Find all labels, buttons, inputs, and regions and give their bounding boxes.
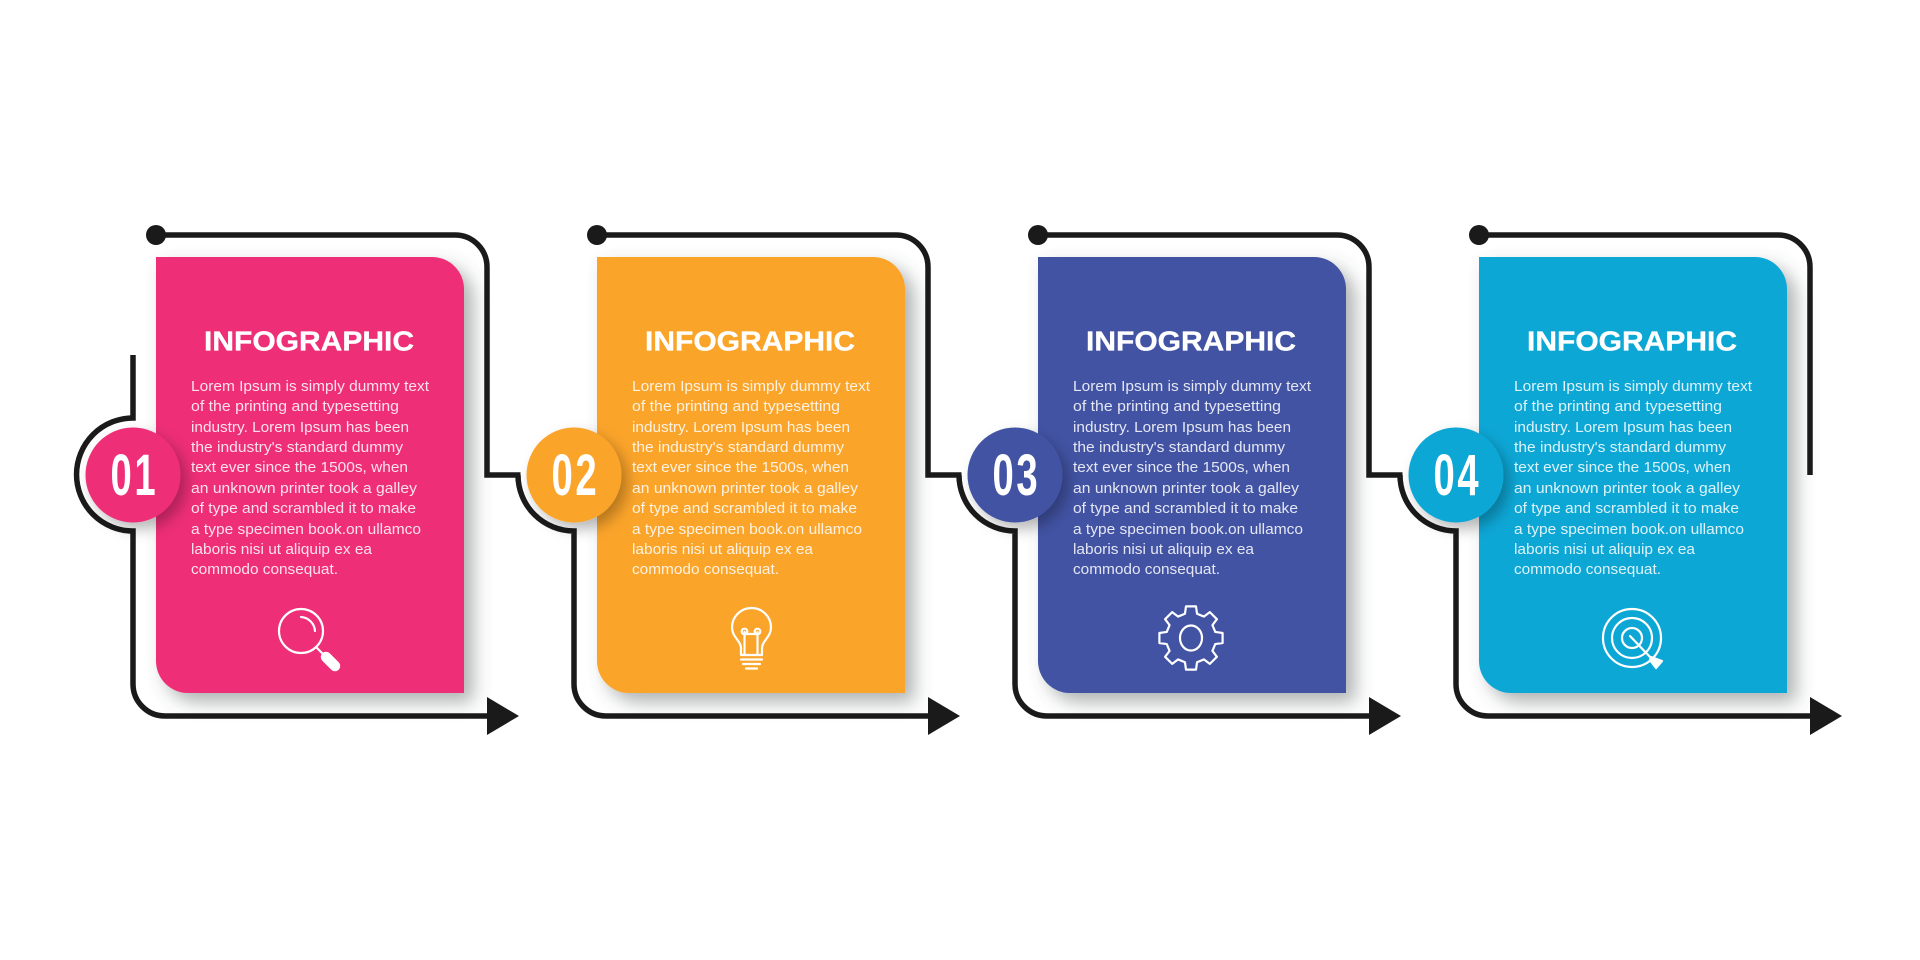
body text: the industry's standard dummy <box>191 439 404 456</box>
arrow head <box>487 697 519 735</box>
start dot <box>1469 225 1489 245</box>
flow line around number <box>1400 475 1813 716</box>
body text: commodo consequat. <box>1514 561 1661 578</box>
body text: of the printing and typesetting <box>632 398 840 415</box>
flow line around number <box>77 355 490 716</box>
body text: Lorem Ipsum is simply dummy text <box>1073 378 1312 395</box>
body text: industry. Lorem Ipsum has been <box>1514 419 1732 436</box>
icon: target with arrow <box>1603 609 1662 668</box>
heading: INFOGRAPHIC <box>1086 326 1296 356</box>
body text: of type and scrambled it to make <box>191 500 416 517</box>
heading: INFOGRAPHIC <box>645 326 855 356</box>
body text: laboris nisi ut aliquip ex ea <box>1073 541 1255 558</box>
connector line <box>156 235 520 475</box>
number: 03 <box>992 444 1040 508</box>
body text: a type specimen book.on ullamco <box>191 521 421 538</box>
flow line around number <box>518 475 931 716</box>
body text: commodo consequat. <box>632 561 779 578</box>
body text <box>191 378 430 578</box>
arrow head <box>928 697 960 735</box>
body text: of the printing and typesetting <box>1073 398 1281 415</box>
body text: an unknown printer took a galley <box>1073 480 1300 497</box>
number badge <box>86 428 180 522</box>
body text: an unknown printer took a galley <box>191 480 418 497</box>
body text: the industry's standard dummy <box>1073 439 1286 456</box>
flow line around number <box>959 475 1372 716</box>
body text <box>632 378 871 578</box>
body text: of type and scrambled it to make <box>632 500 857 517</box>
body text: of the printing and typesetting <box>191 398 399 415</box>
connector line <box>597 235 962 475</box>
body text: of the printing and typesetting <box>1514 398 1722 415</box>
panel: step 2 <box>518 225 962 735</box>
body text <box>1073 378 1312 578</box>
body text: laboris nisi ut aliquip ex ea <box>1514 541 1696 558</box>
card background <box>156 257 464 693</box>
body text: industry. Lorem Ipsum has been <box>1073 419 1291 436</box>
body text: Lorem Ipsum is simply dummy text <box>632 378 871 395</box>
body text: commodo consequat. <box>1073 561 1220 578</box>
card background <box>597 257 905 693</box>
panel: step 4 <box>1400 225 1842 735</box>
body text: text ever since the 1500s, when <box>1514 459 1731 476</box>
body text <box>1514 378 1753 578</box>
body text: industry. Lorem Ipsum has been <box>191 419 409 436</box>
body text: text ever since the 1500s, when <box>632 459 849 476</box>
number: 01 <box>110 444 158 508</box>
icon: magnifying glass <box>279 609 335 666</box>
panel: step 1 <box>77 225 521 735</box>
number: 04 <box>1434 444 1481 508</box>
body text: industry. Lorem Ipsum has been <box>632 419 850 436</box>
heading: INFOGRAPHIC <box>204 326 414 356</box>
body text: the industry's standard dummy <box>632 439 845 456</box>
body text: an unknown printer took a galley <box>632 480 859 497</box>
start dot <box>146 225 166 245</box>
heading: INFOGRAPHIC <box>1527 326 1737 356</box>
card background <box>1038 257 1346 693</box>
arrow head <box>1810 697 1842 735</box>
body text: a type specimen book.on ullamco <box>1514 521 1744 538</box>
body text: text ever since the 1500s, when <box>1073 459 1290 476</box>
panel: step 3 <box>959 225 1402 735</box>
body text: a type specimen book.on ullamco <box>632 521 862 538</box>
number badge <box>1408 428 1504 522</box>
icon: gear <box>1159 606 1223 670</box>
body text: Lorem Ipsum is simply dummy text <box>1514 378 1753 395</box>
body text: an unknown printer took a galley <box>1514 480 1741 497</box>
body text: of type and scrambled it to make <box>1073 500 1298 517</box>
start dot <box>587 225 607 245</box>
body text: laboris nisi ut aliquip ex ea <box>632 541 814 558</box>
connector line <box>1479 235 1810 475</box>
body text: a type specimen book.on ullamco <box>1073 521 1303 538</box>
number: 02 <box>552 444 599 508</box>
body text: of type and scrambled it to make <box>1514 500 1739 517</box>
connector line <box>1038 235 1402 475</box>
start dot <box>1028 225 1048 245</box>
number badge <box>526 428 622 522</box>
body text: laboris nisi ut aliquip ex ea <box>191 541 373 558</box>
number badge <box>968 428 1062 522</box>
body text: Lorem Ipsum is simply dummy text <box>191 378 430 395</box>
body text: text ever since the 1500s, when <box>191 459 408 476</box>
body text: the industry's standard dummy <box>1514 439 1727 456</box>
arrow head <box>1369 697 1401 735</box>
icon: light bulb <box>732 608 771 668</box>
body text: commodo consequat. <box>191 561 338 578</box>
card background <box>1479 257 1787 693</box>
